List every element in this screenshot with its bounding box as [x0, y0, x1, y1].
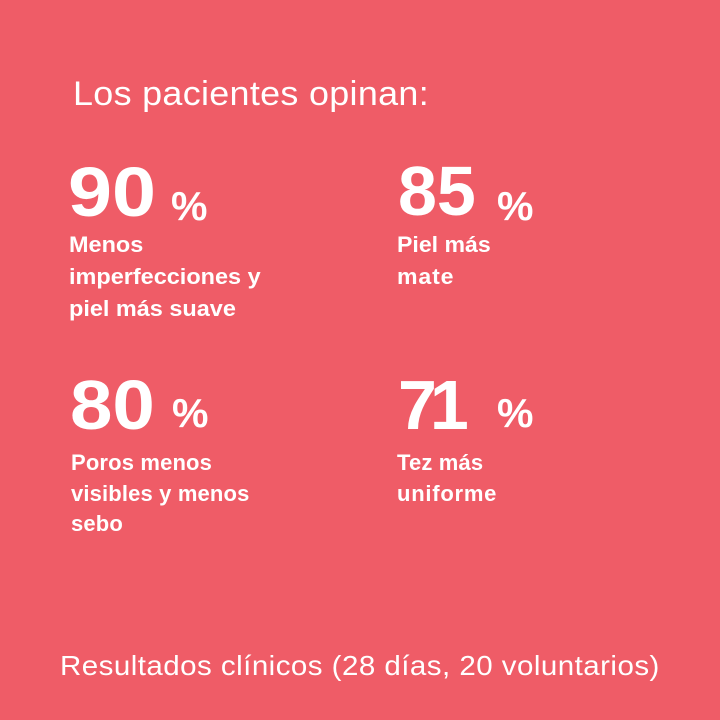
value: 85: 85 [398, 152, 476, 230]
label: imperfecciones: piel más suave [69, 296, 236, 321]
percent sign: % [497, 390, 533, 436]
label: poros: sebo [71, 511, 123, 536]
label: tez [397, 450, 497, 506]
title: Los pacientes opinan: [73, 75, 429, 113]
label: poros [71, 450, 250, 536]
percent sign: % [172, 390, 208, 436]
footer note: Resultados clínicos (28 días, 20 voluntarios) [60, 650, 660, 681]
value: 71: 71 [398, 366, 462, 444]
label: poros: Poros menos [71, 450, 212, 475]
label: imperfecciones: Menos [69, 232, 143, 257]
label: imperfecciones [69, 232, 261, 321]
percent sign: % [497, 183, 533, 229]
label: piel mate: mate [397, 264, 454, 288]
label: piel mate [397, 232, 491, 288]
label: poros: visibles y menos [71, 480, 250, 506]
percent sign: % [171, 183, 207, 229]
label: imperfecciones: imperfecciones y [69, 264, 261, 289]
label: tez: uniforme [397, 480, 497, 506]
stat: 80% [70, 366, 250, 536]
stat: 85% [397, 152, 533, 288]
label: piel mate: Piel más [397, 232, 491, 257]
label: tez: Tez más [397, 450, 483, 475]
stat: 71% [397, 366, 533, 506]
value: 90: 90 [68, 153, 156, 231]
value: 80: 80 [70, 366, 155, 444]
stat: 90% [68, 153, 261, 321]
